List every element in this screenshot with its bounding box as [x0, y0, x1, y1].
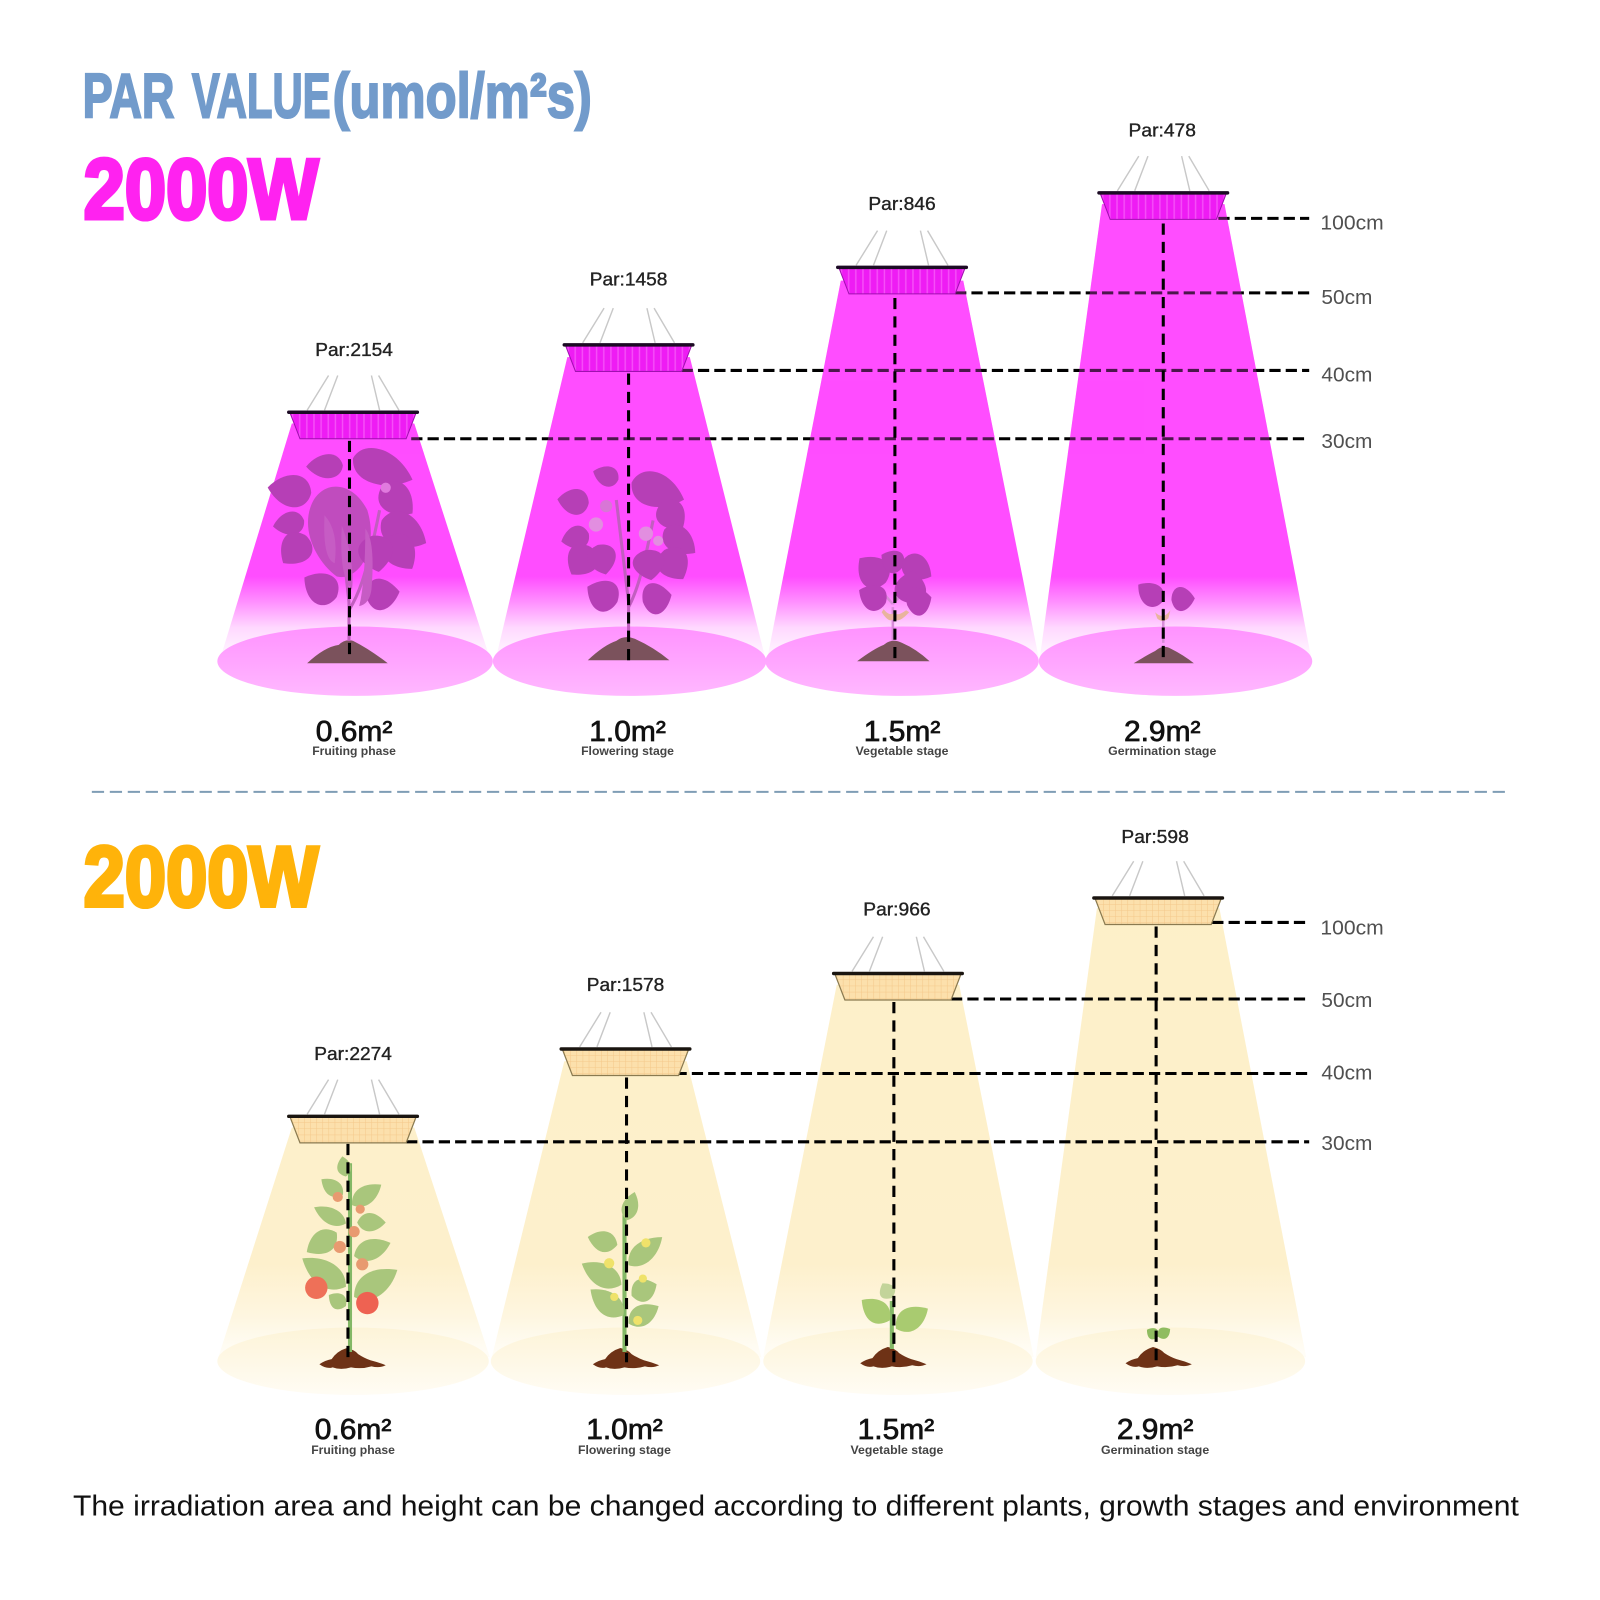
area labels warm: Vegetable stage [851, 1443, 944, 1457]
par values warm: Par:598 [1121, 826, 1189, 847]
center height lines warm [348, 927, 1156, 1362]
area labels purple: 1.5m² [864, 716, 940, 748]
par values purple [315, 120, 1196, 360]
lamp 3 purple [838, 231, 966, 294]
height labels warm: 30cm [1321, 1133, 1372, 1155]
soil mounds warm [319, 1347, 1192, 1369]
plant: sprout germination [1144, 1324, 1173, 1342]
par values warm: Par:2274 [314, 1043, 392, 1064]
area labels warm: 1.0m² [586, 1414, 663, 1446]
area labels purple: 1.0m² [589, 716, 666, 748]
title: PAR value: VALUE [192, 61, 331, 131]
plant: germination purple [1131, 576, 1196, 643]
irradiation ellipses warm [217, 1328, 1305, 1395]
area labels purple: Germination stage [1108, 744, 1217, 758]
footer note: The irradiation area and height can be changed according to different plants, growth stages and environment [73, 1490, 1519, 1522]
lamp 2 purple [564, 308, 693, 371]
plant: tomato fruiting [295, 1155, 404, 1352]
title: PAR value [83, 61, 592, 131]
plant: flowering purple [556, 462, 703, 638]
height labels purple: 30cm [1321, 431, 1372, 453]
height labels purple: 40cm [1321, 365, 1372, 387]
plant: fruiting purple [266, 442, 434, 641]
par values purple: Par:846 [868, 193, 936, 214]
area labels purple: Flowering stage [581, 744, 674, 758]
area labels purple: 2.9m² [1124, 716, 1201, 748]
height labels warm: 50cm [1321, 990, 1372, 1012]
light beams purple [220, 204, 1311, 658]
lamp 2 warm [561, 1012, 690, 1076]
divider [92, 791, 1508, 793]
height labels warm [1320, 918, 1384, 1155]
title: PAR value: (umol/m²s) [333, 61, 592, 131]
par values purple: Par:1458 [590, 269, 667, 290]
area labels warm: 2.9m² [1117, 1414, 1193, 1446]
area labels purple: Vegetable stage [856, 744, 949, 758]
light beams warm [218, 908, 1306, 1357]
height labels purple: 50cm [1321, 287, 1372, 309]
beam tint over guide lines [282, 204, 1272, 454]
par values warm [314, 826, 1189, 1064]
lamp 3 warm [834, 937, 962, 1000]
area labels warm: Germination stage [1101, 1443, 1209, 1457]
area labels warm: 0.6m² [315, 1414, 391, 1446]
plant: seedling vegetable [855, 1279, 934, 1349]
height labels purple: 100cm [1320, 213, 1384, 235]
panel: purple spectrum [217, 120, 1384, 758]
area labels warm [311, 1414, 1209, 1457]
lamp 1 purple [289, 376, 417, 439]
irradiation ellipses purple [217, 627, 1312, 696]
center height lines purple [349, 223, 1163, 661]
height labels warm: 40cm [1321, 1063, 1372, 1085]
par values warm: Par:966 [863, 898, 931, 919]
area labels purple [312, 716, 1217, 758]
height guide lines purple [411, 218, 1309, 439]
title: PAR value: PAR [83, 61, 174, 131]
panel: warm spectrum [217, 826, 1384, 1457]
heading: 2000W magenta: 2000W [84, 141, 318, 237]
par values purple: Par:2154 [315, 339, 393, 360]
par values warm: Par:1578 [587, 974, 664, 995]
height labels purple [1320, 213, 1384, 453]
plant: vegetable purple [849, 545, 938, 641]
area labels purple: 0.6m² [316, 716, 392, 748]
par values purple: Par:478 [1129, 120, 1196, 141]
area labels warm: Flowering stage [578, 1443, 671, 1457]
height guide lines warm [406, 922, 1309, 1142]
heading: 2000W amber: 2000W [84, 829, 318, 925]
plant: tomato flowering [576, 1190, 669, 1352]
soil mounds purple [307, 637, 1194, 663]
height labels warm: 100cm [1320, 918, 1384, 940]
area labels purple: Fruiting phase [312, 744, 396, 758]
area labels warm: 1.5m² [858, 1414, 934, 1446]
lamp 1 warm [289, 1080, 417, 1143]
lamp 4 warm [1094, 861, 1222, 924]
lamp 4 purple [1099, 156, 1228, 219]
area labels warm: Fruiting phase [311, 1443, 395, 1457]
